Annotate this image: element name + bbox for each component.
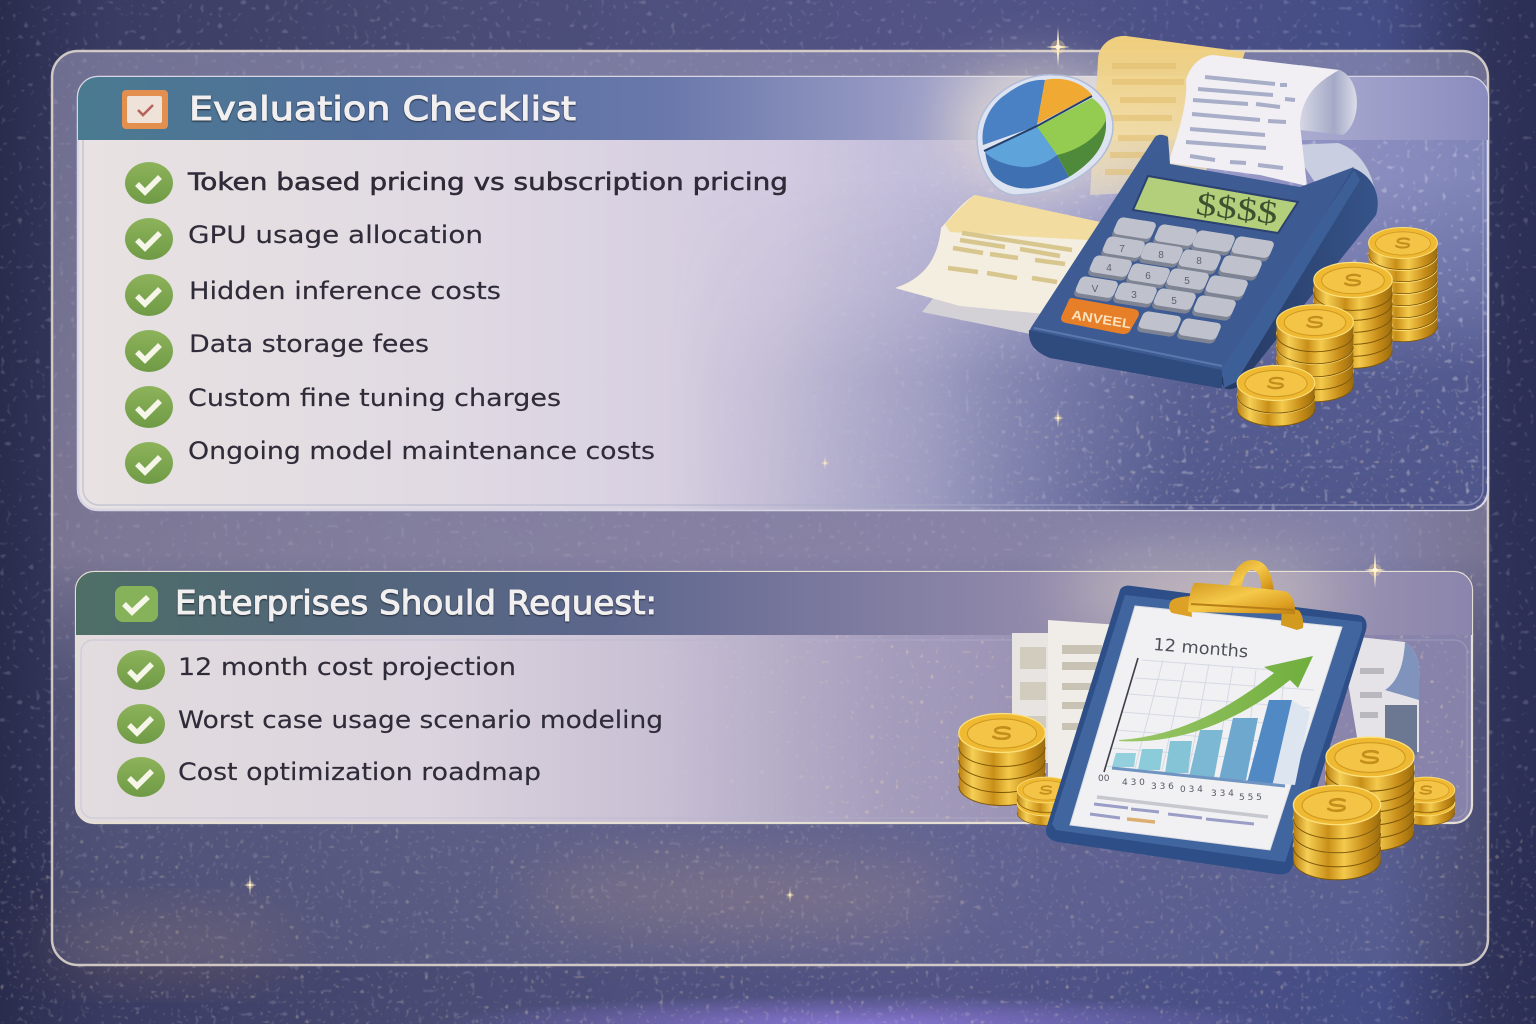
chart title: 12 months [1153,635,1249,662]
panel header bar [78,77,1488,140]
background documents [1012,620,1419,800]
calculator keypad: 5 [1184,276,1190,287]
panel header bar [76,572,1472,635]
bar chart [1104,658,1314,786]
clipboard paper [1070,606,1342,850]
heading: evaluation checklist: Evaluation Checklist [189,89,576,128]
calculator orange key [1061,298,1139,334]
request item 2: Worst case usage scenario modeling [178,706,663,734]
calculator keypad: 3 [1131,290,1137,301]
request item 1: 12 month cost projection [178,653,516,681]
calculator screen: $$$$ [1194,185,1280,231]
glow behind illustration [950,70,1130,190]
clipboard board [1046,586,1367,874]
checklist item 4: Data storage fees [189,330,429,358]
panel: enterprises should request [76,572,1472,823]
pie chart [977,75,1113,195]
chart tick labels: 5 5 5 [1239,793,1262,803]
illustration: calculator with receipts, pie chart and coins [895,36,1437,426]
paper footer lines [1090,797,1268,824]
yellow receipt back [1090,36,1245,195]
calculator keypad: 4 [1106,263,1112,274]
chart axis [1104,658,1138,772]
checklist item 1: Token based pricing vs subscription pricing [187,168,788,196]
request item 3 [117,757,541,797]
checklist item 6: Ongoing model maintenance costs [188,437,655,465]
calculator keypad: 8 [1158,250,1164,261]
checklist item 5 [125,384,561,428]
coin stacks [1237,228,1437,426]
calculator keypad: 8 [1196,256,1202,267]
checklist item 3 [125,274,501,316]
icon: green checkbox [115,586,158,622]
lower left receipt [895,195,1100,340]
request item 3: Cost optimization roadmap [178,758,541,786]
calculator orange key: ANVEEL [1071,307,1132,331]
calculator keypad: V [1092,284,1099,295]
right coin stacks [1293,737,1455,880]
request item 1 [117,650,516,690]
left coin stacks [959,714,1075,825]
checklist item 1 [125,162,788,204]
calculator keypad: 7 [1119,244,1125,255]
checklist item 6 [125,437,655,484]
growth arrow [1119,656,1313,741]
panel: evaluation checklist [78,77,1488,510]
heading: enterprises should request: Enterprises Should Request: [175,583,657,622]
illustration: clipboard with growth chart and coins [959,560,1455,880]
glow behind clipboard [1060,560,1340,620]
chart tick labels [1098,774,1262,803]
calculator screen [1133,176,1298,233]
chart tick labels: 3 3 6 [1151,782,1174,792]
calculator keypad: 6 [1145,271,1151,282]
chart tick labels: 3 3 4 [1211,789,1234,799]
checklist item 3: Hidden inference costs [189,277,501,305]
checklist item 5: Custom fine tuning charges [188,384,561,412]
checklist item 2 [125,218,483,260]
chart tick labels: 00 [1098,774,1110,784]
printer roll and paper [1168,55,1376,220]
icon: orange checkbox [122,90,168,129]
checklist item 4 [125,330,429,372]
calculator body [1029,135,1378,389]
chart tick labels: 4 3 0 [1122,778,1145,788]
chart tick labels: 0 3 4 [1180,785,1203,795]
request item 2 [117,704,663,744]
calculator keypad: 5 [1171,296,1177,307]
sparkles [243,27,1386,903]
calculator keypad [1073,217,1275,344]
checklist item 2: GPU usage allocation [188,221,483,249]
clipboard clip [1169,560,1303,630]
